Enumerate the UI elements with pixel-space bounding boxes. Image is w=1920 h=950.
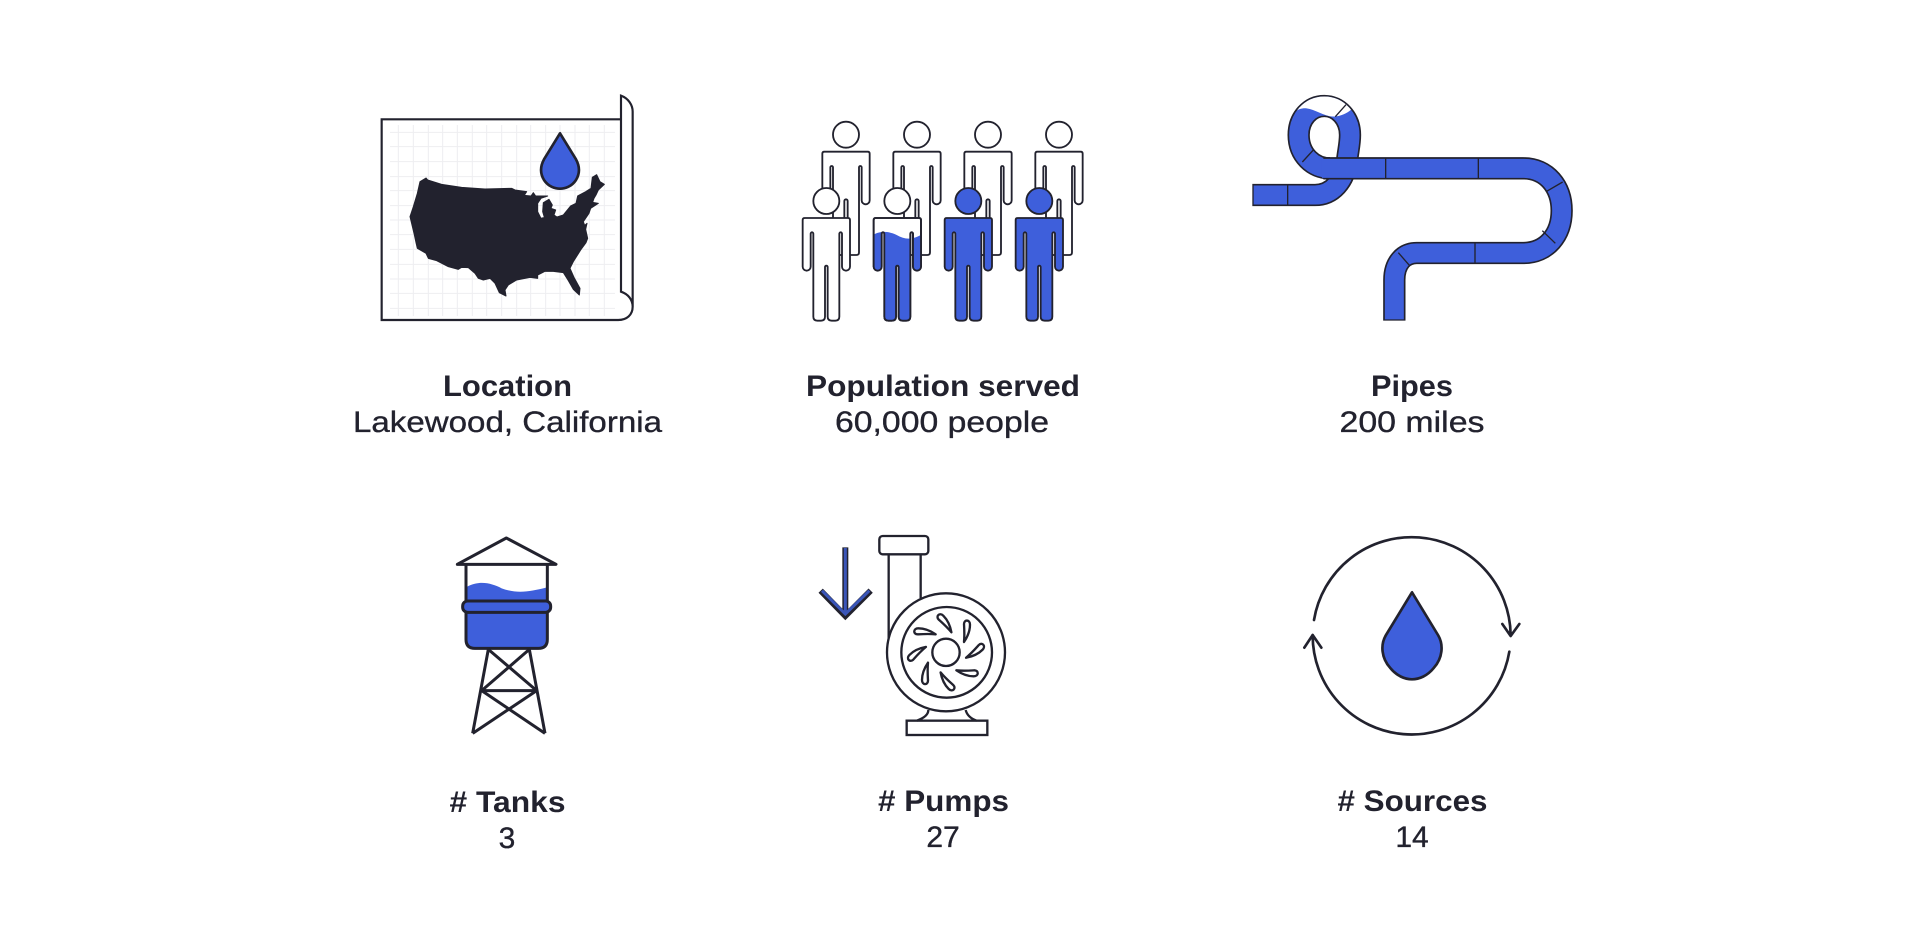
label: pipes: 200 miles — [1340, 406, 1484, 439]
label: population served — [806, 370, 1080, 439]
label: location: Location — [443, 370, 572, 403]
label: tanks — [450, 786, 566, 855]
panel: sources — [1304, 537, 1519, 854]
label: tanks: 3 — [499, 822, 515, 855]
panel: location — [353, 96, 662, 439]
icon: water cycle — [1304, 537, 1519, 734]
label: sources: # Sources — [1338, 785, 1488, 818]
panel: tanks — [450, 538, 566, 855]
label: location: Lakewood, California — [353, 406, 662, 439]
panel: population served — [803, 122, 1083, 439]
label: pumps: # Pumps — [878, 785, 1009, 818]
label: sources: 14 — [1395, 821, 1429, 854]
label: population served: Population served — [806, 370, 1080, 403]
panel: pipes — [1252, 105, 1563, 439]
icon: pump with arrow — [821, 536, 1005, 735]
icon: water tower — [457, 538, 556, 733]
icon: people — [803, 122, 1083, 321]
label: sources — [1338, 785, 1488, 854]
icon: map with water drop — [382, 96, 633, 320]
water drop — [541, 133, 579, 189]
label: pipes: Pipes — [1371, 370, 1453, 403]
label: population served: 60,000 people — [835, 406, 1049, 439]
panel: pumps — [821, 536, 1009, 854]
arrow: down — [821, 547, 871, 616]
USA silhouette — [410, 175, 604, 296]
icon: pipe — [1252, 105, 1563, 321]
label: pipes — [1340, 370, 1484, 439]
label: tanks: # Tanks — [450, 786, 566, 819]
label: location — [353, 370, 662, 439]
label: pumps — [878, 785, 1009, 854]
label: pumps: 27 — [926, 821, 960, 854]
